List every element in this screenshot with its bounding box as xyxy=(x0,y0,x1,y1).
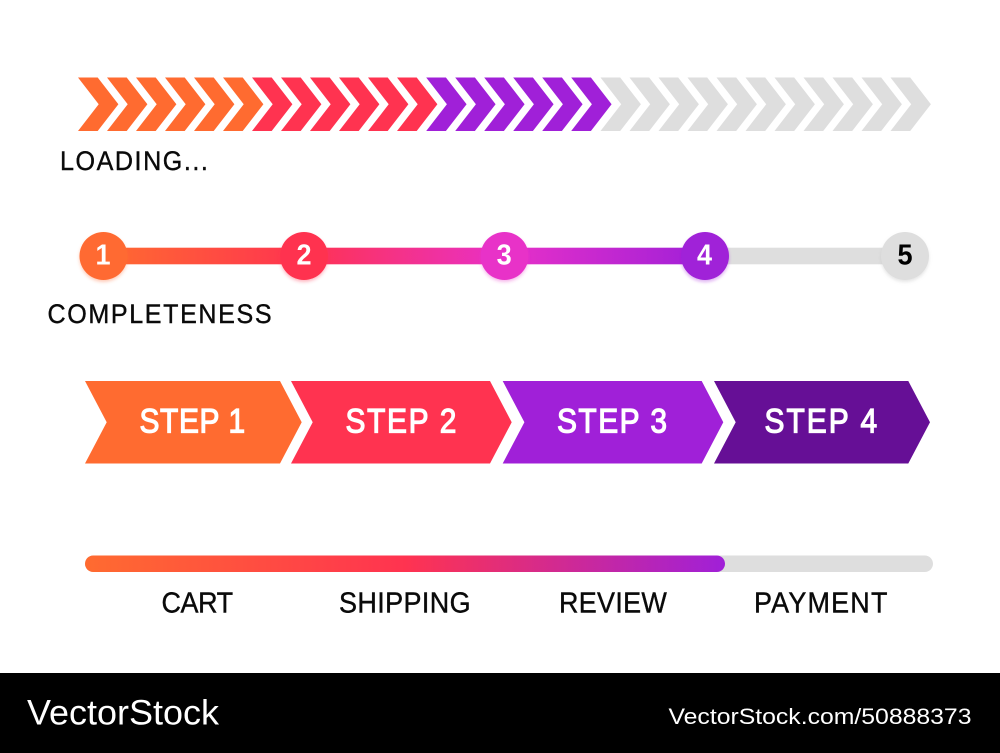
step 3 arrow xyxy=(503,381,723,464)
brand wordmark: VectorStock xyxy=(27,693,220,732)
gradient track xyxy=(103,248,705,264)
label: loading: LOADING... xyxy=(60,145,208,176)
node 2: 2 xyxy=(296,239,312,271)
gradient fill xyxy=(85,556,725,572)
node 4: 4 xyxy=(697,239,713,271)
label: review: REVIEW xyxy=(559,587,667,619)
step 2 arrow: STEP 2 xyxy=(346,402,456,440)
step 1 arrow: STEP 1 xyxy=(140,402,245,440)
label: payment: PAYMENT xyxy=(754,587,887,619)
node 5 xyxy=(881,232,929,280)
grey track xyxy=(705,248,905,264)
panel: step arrows xyxy=(85,381,930,464)
panel: checkout progress bar xyxy=(85,556,933,619)
node 2 xyxy=(280,232,328,280)
orange chevrons xyxy=(78,78,263,131)
label: shipping: SHIPPING xyxy=(339,587,471,619)
label: cart: CART xyxy=(162,587,233,619)
red chevrons xyxy=(252,78,437,131)
grey track xyxy=(85,556,933,572)
node 3 xyxy=(480,232,528,280)
step 4 arrow xyxy=(714,381,930,464)
panel: chevron loading bar xyxy=(60,78,931,176)
label: completeness: COMPLETENESS xyxy=(48,298,272,329)
node 5: 5 xyxy=(897,239,913,271)
purple chevrons xyxy=(426,78,612,131)
step 4 arrow: STEP 4 xyxy=(764,402,877,440)
image id url: VectorStock.com/50888373 xyxy=(668,704,972,729)
panel: numbered completeness tracker xyxy=(48,232,929,329)
node 3: 3 xyxy=(497,239,512,271)
node 4 xyxy=(681,232,729,280)
grey chevrons xyxy=(600,78,931,131)
footer band xyxy=(0,673,1000,753)
step 3 arrow: STEP 3 xyxy=(557,402,667,440)
node 1: 1 xyxy=(95,239,111,271)
step 1 arrow xyxy=(85,381,302,464)
node 1 xyxy=(80,232,128,280)
step 2 arrow xyxy=(291,381,512,464)
